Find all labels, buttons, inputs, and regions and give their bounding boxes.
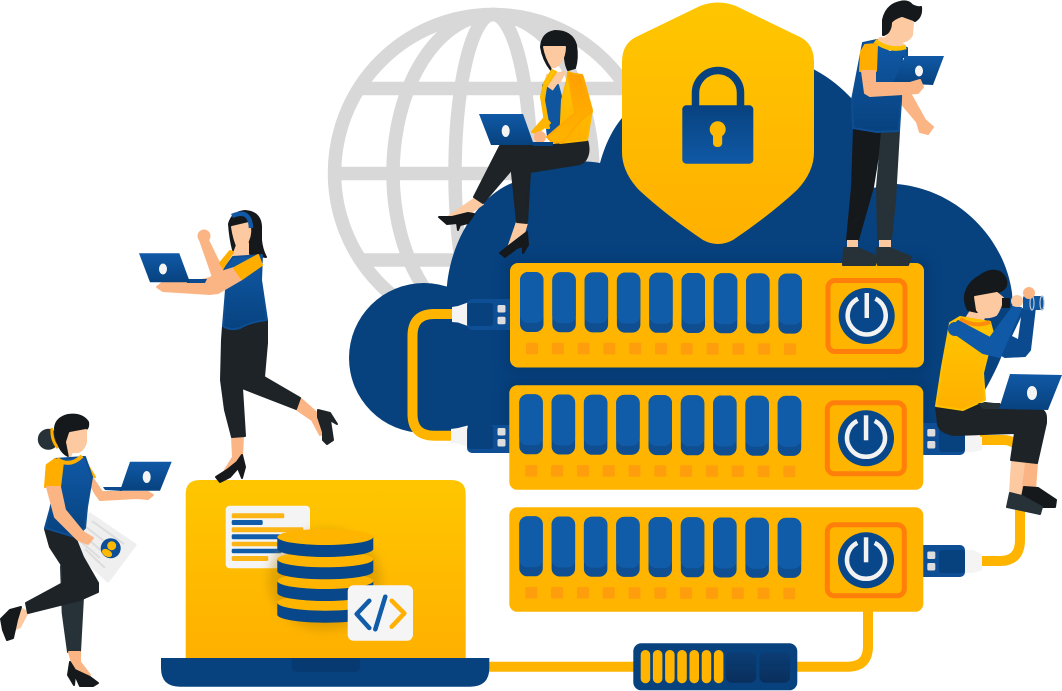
connector: server 2 left plug (451, 425, 515, 453)
cable: right loop between server 2 and server 3 (980, 440, 1020, 561)
server rack unit 3 (509, 507, 923, 612)
connector: server 1 left plug (452, 299, 515, 330)
shield with padlock (622, 2, 814, 244)
person: man standing on server with laptop (843, 1, 944, 265)
connector: server 2 right plug (918, 423, 982, 455)
connector: server 3 right plug (918, 545, 982, 577)
server rack unit 1 (510, 263, 924, 368)
laptop with database (161, 480, 489, 687)
cable: left loop between server 1 and server 2 (412, 314, 452, 436)
cloud (349, 50, 1013, 453)
person: man sitting with binoculars and laptop (936, 271, 1062, 514)
person: woman standing on laptop with computer (139, 211, 337, 482)
server shadows on cloud (507, 260, 927, 425)
document card (226, 506, 310, 568)
code card (348, 585, 413, 641)
server rack unit 2 (509, 385, 923, 490)
laptop base (161, 658, 489, 687)
globe (334, 14, 652, 332)
laptop screen (186, 480, 466, 660)
database cylinder (277, 529, 373, 623)
resume sheet (72, 514, 135, 581)
cable: laptop to hub to server 3 (480, 605, 868, 667)
database shadow (269, 530, 381, 630)
person: woman sitting on cloud with laptop (439, 31, 592, 257)
person: woman walking with laptop and document (1, 415, 172, 686)
hub: bottom connector (633, 643, 797, 690)
